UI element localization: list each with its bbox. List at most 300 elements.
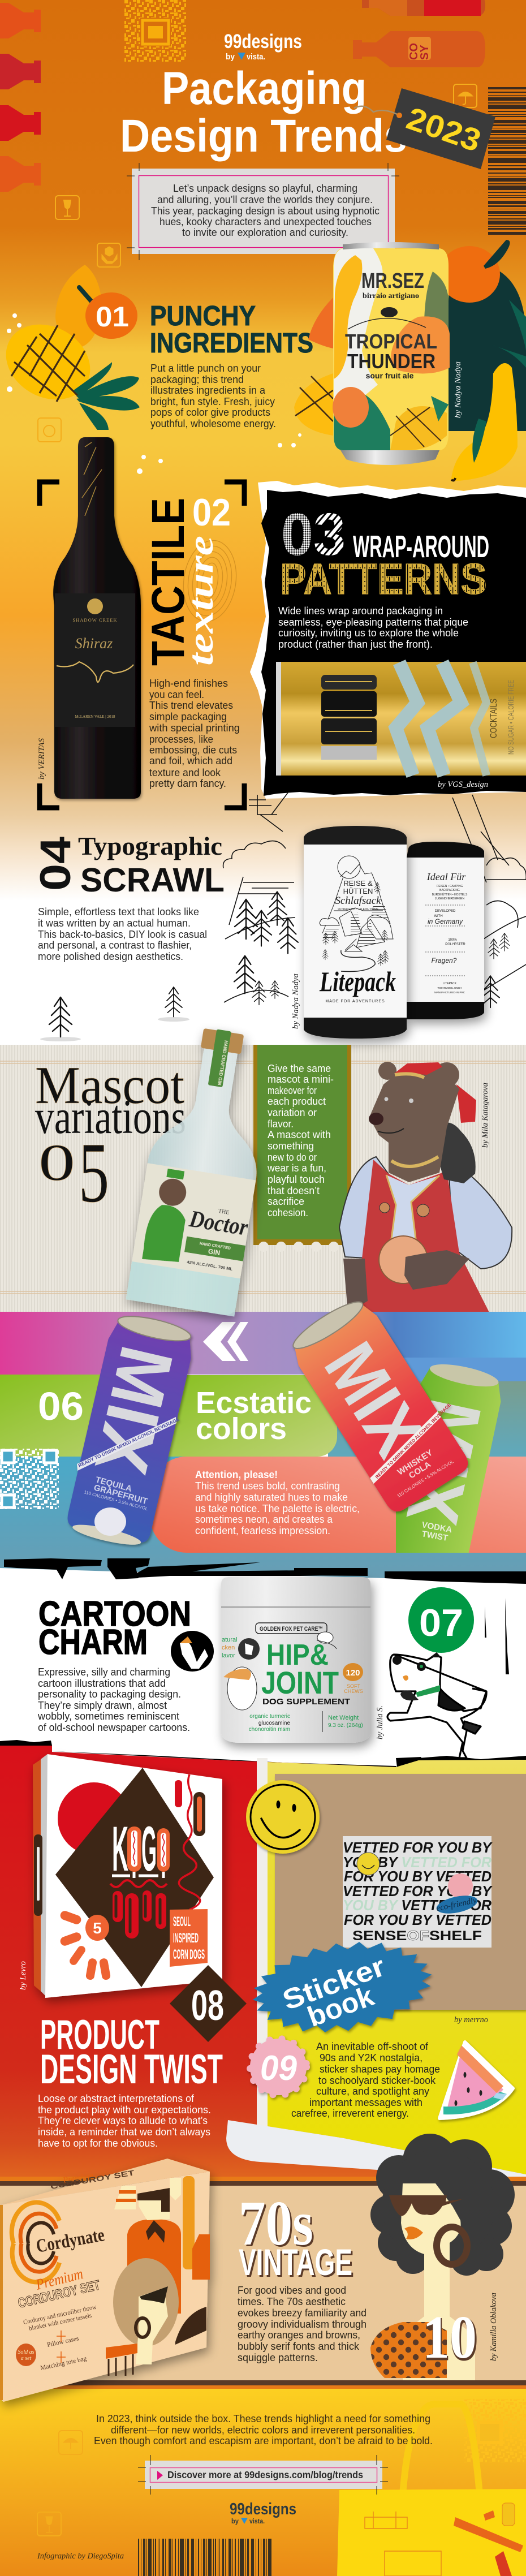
text: section 07 body: Expressive, silly and charming bbox=[38, 1666, 170, 1678]
panel: green ribbon with mascot text: cohesion. bbox=[268, 1207, 308, 1218]
can: mix vodka twist: TWIST bbox=[421, 1529, 449, 1543]
heading: 70s vintage: 70s bbox=[240, 2190, 315, 2260]
text: section 01 body bbox=[150, 362, 276, 429]
box: cordynate corduroy set: CORDUROY SET bbox=[50, 2168, 135, 2191]
heading: product design twist: DESIGN TWIST bbox=[40, 2047, 223, 2092]
credit: Kamilla Oblakova: by Kamilla Oblakova bbox=[489, 2293, 498, 2361]
panel: section 10 tan band bbox=[0, 2177, 526, 2389]
package: litepack back: POLYESTER bbox=[445, 943, 465, 946]
jar: hip and joint: 120 bbox=[346, 1668, 360, 1678]
text: section 09 body: carefree, irreverent energy. bbox=[291, 2107, 409, 2119]
heading: product design twist bbox=[40, 2012, 223, 2092]
number 06: 06 bbox=[38, 1384, 84, 1428]
panel: kraft paper with sticker sheet: YOU BY VETTED FOR bbox=[343, 1897, 491, 1914]
package: litepack back: Fragen? bbox=[432, 957, 457, 964]
package: litepack back: in Germany bbox=[428, 917, 463, 925]
package: litepack front: Schlafsack bbox=[335, 895, 381, 907]
jar: hip and joint: GOLDEN FOX PET CARE™ bbox=[260, 1626, 323, 1632]
panel: section 09 yellow background with white strip bbox=[257, 1758, 526, 2174]
text: section 09 body: An inevitable off-shoot of bbox=[316, 2040, 429, 2052]
icon: wine glass bbox=[55, 196, 79, 219]
bottle: the doctor gin bbox=[126, 1022, 278, 1317]
text: section 10 body: earthy oranges and browns, bbox=[238, 2329, 360, 2341]
package: litepack back bbox=[407, 842, 484, 1019]
text: section 03 body: Wide lines wrap around packaging in bbox=[278, 605, 443, 617]
panel: section 04 white area bbox=[0, 904, 526, 1046]
icon: wine glass bottom bbox=[37, 2512, 61, 2536]
text: section 02 body: processes, like bbox=[149, 733, 213, 745]
icon: package in hands bbox=[97, 243, 120, 267]
box: cordynate corduroy set: Corduroy and microfiber throw bbox=[23, 2304, 97, 2326]
can: tropical thunder: birraio artigiano bbox=[363, 292, 419, 300]
text: closing statement: In 2023, think outside the box. These trends highlight a need for something bbox=[96, 2413, 430, 2424]
text: section 09 body: 90s and Y2K nostalgia, bbox=[320, 2052, 422, 2064]
jar: hip and joint: atural bbox=[222, 1636, 238, 1643]
bottle: the doctor gin: Doctor bbox=[187, 1206, 250, 1241]
title: Packaging bbox=[162, 63, 367, 114]
call to action button bbox=[138, 2455, 388, 2495]
can: mix tequila grapefruit: GRAPEFRUIT bbox=[93, 1483, 149, 1506]
panel: green ribbon with mascot text: each product bbox=[268, 1095, 326, 1107]
logo: 99designs by vista dark: by bbox=[231, 2517, 239, 2525]
text: section 07 body: They’re simply drawn, almost bbox=[38, 1699, 167, 1711]
package: litepack front: REISE & bbox=[343, 879, 373, 888]
text: section 07 body: cartoon illustrations that add bbox=[38, 1677, 166, 1689]
text: section 07 body: wobbly, sometimes reminiscent bbox=[37, 1710, 179, 1722]
number 07 circle bbox=[408, 1587, 474, 1653]
credit: Julia S.: by Julia S. bbox=[376, 1705, 385, 1739]
illustration: fruit and leaves behind can bbox=[137, 240, 526, 481]
left background bottles bbox=[0, 3, 41, 192]
box: kogo corn dogs: SEOUL bbox=[173, 1914, 191, 1929]
heading: punchy ingredients bbox=[150, 301, 313, 359]
jar: hip and joint: glucosamine bbox=[258, 1720, 290, 1726]
text: section 10 body: For good vibes and good bbox=[238, 2284, 346, 2296]
top right background bottles: CO bbox=[408, 43, 420, 60]
panel: kraft paper with sticker sheet: VETTED FOR YOU BY bbox=[343, 1839, 493, 1856]
top right background bottles: SY bbox=[419, 45, 431, 60]
background QR code bottom bbox=[464, 2399, 526, 2462]
heading: ecstatic colors: colors bbox=[196, 1412, 287, 1446]
heading: tactile 02 texture: 02 bbox=[192, 491, 231, 534]
can: wrap-around cocktail can bbox=[276, 662, 526, 776]
jar: hip and joint: HIP& bbox=[266, 1639, 329, 1672]
QR code white bbox=[0, 1449, 59, 1509]
panel: green ribbon with mascot text: Give the same bbox=[268, 1062, 331, 1074]
package: litepack back: Ideal Für bbox=[426, 871, 466, 882]
text: section 07 body bbox=[37, 1666, 190, 1733]
can: mix vodka twist: VODKA bbox=[421, 1520, 453, 1535]
heading: 70s vintage: 70s bbox=[239, 2189, 313, 2259]
jar: hip and joint: chonoroitin msm bbox=[249, 1726, 290, 1733]
text: section 09 body: sticker shapes pay homage bbox=[320, 2063, 440, 2075]
heading: mascot variations 05: 0 bbox=[38, 1134, 75, 1191]
text: section 08 body bbox=[38, 2092, 211, 2149]
bottle: the doctor gin: HAND CRAFTED GIN bbox=[217, 1040, 228, 1085]
package: litepack back: BACKPACKING bbox=[439, 889, 460, 892]
bottle: the doctor gin: HAND CRAFTED bbox=[199, 1242, 231, 1251]
heading: ecstatic colors: Ecstatic bbox=[196, 1386, 312, 1420]
heading: 03 wrap-around patterns: 03 bbox=[281, 501, 346, 568]
section 02 brackets bbox=[40, 482, 244, 808]
panel: green ribbon with mascot text: A mascot with bbox=[268, 1128, 331, 1140]
text: section 08 body: They’re clever ways to allude to what’s bbox=[38, 2114, 208, 2126]
heading: 03 wrap-around patterns: PATTERNS bbox=[280, 555, 487, 604]
jar: hip and joint bbox=[221, 1577, 370, 1743]
text: section 01 body: Put a little punch on your bbox=[150, 362, 261, 374]
text: section 01 body: youthful, wholesome energy. bbox=[150, 417, 276, 429]
can: tropical thunder bbox=[333, 242, 450, 465]
heading: tactile 02 texture: TACTILE bbox=[143, 498, 194, 666]
sticker: starburst sticker book: Sticker bbox=[278, 1950, 389, 2016]
background QR code bbox=[124, 0, 187, 62]
box: kogo corn dogs: CORN DOGS bbox=[173, 1947, 205, 1962]
jar: hip and joint: lavor bbox=[222, 1652, 235, 1659]
text: closing statement bbox=[94, 2413, 433, 2446]
panel: kraft paper with sticker sheet: VETTED FOR YOU BY bbox=[343, 1883, 493, 1899]
text: section 09 body: culture, and spotlight any bbox=[316, 2085, 430, 2097]
jar: hip and joint: 9.3 oz. (264g) bbox=[328, 1722, 363, 1729]
heading: tactile 02 texture: texture bbox=[180, 536, 221, 666]
heading: punchy ingredients: PUNCHY bbox=[150, 301, 256, 331]
can: tropical thunder: MR.SEZ bbox=[361, 269, 424, 293]
box: cordynate corduroy set bbox=[0, 2159, 210, 2402]
can: mix whiskey cola: COLA bbox=[407, 1459, 433, 1481]
title bbox=[120, 63, 407, 162]
text: section 09 body bbox=[291, 2040, 440, 2119]
text: section 07 body: of old-school newspaper cartoons. bbox=[38, 1721, 190, 1733]
text: section 03 body: product (rather than just the front). bbox=[278, 638, 433, 650]
panel: kraft paper with sticker sheet: SENSE OF SHELF bbox=[352, 1928, 482, 1944]
credit: VGS_design: by VGS_design bbox=[438, 780, 488, 789]
package: litepack back: JUGENDHERBERGEN bbox=[435, 897, 465, 901]
heading: 04 typographic scrawl: Typographic bbox=[78, 832, 222, 860]
intro text box: to invite our exploration and curiosity. bbox=[182, 226, 348, 238]
box: cordynate corduroy set: Premium bbox=[33, 2265, 85, 2293]
heading: ecstatic colors bbox=[196, 1386, 312, 1446]
text: section 02 body: embossing, die cuts bbox=[149, 744, 237, 756]
intro text box bbox=[127, 163, 399, 260]
panel: green ribbon with mascot text: makeover for bbox=[268, 1084, 317, 1096]
can: mix tequila grapefruit: READY TO DRINK MIXED ALCOHOL BEVERAGE bbox=[77, 1416, 180, 1468]
text: section 06 body bbox=[195, 1468, 360, 1536]
text: section 08 body: have to opt for the obvious. bbox=[38, 2137, 158, 2149]
text: section 02 body: This trend elevates bbox=[149, 699, 233, 711]
panel: section 08 red background bbox=[0, 1746, 526, 2178]
panel: section 07 white with brush edge bbox=[0, 1558, 526, 1769]
package: litepack back: BURGHÜTTEN • HOSTELS bbox=[432, 893, 468, 897]
panel: kraft paper with sticker sheet bbox=[275, 1774, 526, 2010]
can: mix whiskey cola: 110 CALORIES • 5.5% ALC/VOL bbox=[396, 1459, 455, 1498]
text: section 06 body: us take notice. The palette is electric, bbox=[195, 1502, 360, 1514]
panel: kraft paper with sticker sheet: FOR YOU BY VETTED bbox=[344, 1868, 491, 1885]
can: tropical thunder: TROPICAL bbox=[345, 330, 437, 353]
panel: section 06 colour bands bbox=[0, 1312, 526, 1584]
text: section 04 body bbox=[38, 906, 207, 962]
panel: green ribbon with mascot text: playful touch bbox=[268, 1173, 325, 1185]
package: litepack front: MADE FOR ADVENTURES bbox=[325, 1000, 385, 1003]
can: mix tequila grapefruit: TEQUILA bbox=[94, 1475, 133, 1494]
heading: 04 typographic scrawl: SCRAWL bbox=[80, 861, 225, 899]
box: cordynate corduroy set: a set bbox=[21, 2355, 32, 2362]
can: tropical thunder: THUNDER bbox=[347, 350, 436, 373]
heading: cartoon charm bbox=[38, 1595, 191, 1662]
box: cordynate corduroy set: Pillow cases bbox=[46, 2335, 80, 2349]
text: section 01 body: bright, fun style. Fresh, juicy bbox=[150, 395, 275, 407]
text: section 01 body: packaging; this trend bbox=[150, 373, 244, 385]
package: litepack front: ULTRALEICHT · KLEIN / DÜNN bbox=[338, 907, 378, 911]
panel: green ribbon with mascot text: wear is a fun, bbox=[267, 1162, 326, 1174]
title: Design Trends bbox=[120, 110, 407, 162]
text: section 02 body: with special printing bbox=[149, 722, 240, 734]
text: section 10 body bbox=[238, 2284, 367, 2363]
bottle: the doctor gin: GIN bbox=[208, 1247, 221, 1257]
can: tropical thunder: sour fruit ale bbox=[366, 371, 414, 380]
jar: hip and joint: CHEWS bbox=[344, 1688, 363, 1694]
box: kogo corn dogs: K bbox=[112, 1813, 128, 1884]
text: section 01 body: illustrates ingredients in a bbox=[150, 384, 266, 396]
illustration: bear mascot bbox=[339, 1062, 512, 1318]
credit: infographic by DiegoSpita: Infographic by DiegoSpita bbox=[37, 2552, 124, 2561]
heading: 04 typographic scrawl bbox=[32, 832, 225, 899]
package: litepack back: 100% bbox=[448, 938, 457, 942]
panel: kraft paper with sticker sheet: eco-friendly bbox=[436, 1896, 478, 1913]
logo: 99designs by vista dark: 99designs bbox=[230, 2500, 296, 2518]
box: cordynate corduroy set: Cordynate bbox=[35, 2225, 106, 2257]
credit: Nadya Nadya: by Nadya Nadya bbox=[454, 361, 463, 418]
icon: wine glass small bbox=[38, 418, 61, 442]
number 08 diamond: 08 bbox=[191, 1981, 224, 2029]
text: section 06 body: Attention, please! bbox=[195, 1468, 278, 1480]
wine bottle: SHADOW CREEK bbox=[72, 617, 118, 623]
intro text box: Let’s unpack designs so playful, charming bbox=[173, 182, 357, 194]
text: section 06 body: and highly saturated hues to make bbox=[195, 1491, 348, 1503]
number 09 scalloped sticker: 09 bbox=[260, 2049, 297, 2088]
box: kogo corn dogs: G bbox=[141, 1813, 157, 1884]
heading: punchy ingredients: INGREDIENTS bbox=[150, 328, 313, 359]
credit: Nadya Nadya: by Nadya Nadya bbox=[291, 973, 300, 1029]
panel: green ribbon with mascot text bbox=[253, 1045, 351, 1252]
text: section 06 body: confident, fearless impression. bbox=[195, 1524, 330, 1536]
text: section 02 body: you can feel. bbox=[149, 688, 204, 700]
text: section 06 body: sometimes neon, and creates a bbox=[195, 1513, 333, 1525]
can: mix vodka twist: MIX bbox=[391, 1393, 497, 1531]
can: mix tequila grapefruit bbox=[63, 1310, 198, 1550]
box: kogo corn dogs: 5 bbox=[93, 1919, 102, 1937]
jar: hip and joint: Net Weight bbox=[328, 1715, 359, 1721]
can: mix tequila grapefruit: 110 CALORIES • 5.5% ALC/VOL bbox=[83, 1489, 149, 1511]
text: section 09 body: important messages with bbox=[309, 2096, 422, 2108]
intro text box: and alluring, you’ll crave the worlds they conjure. bbox=[157, 193, 373, 205]
package: litepack back: WITH bbox=[434, 915, 443, 918]
can: wrap-around cocktail can: COCKTAILS bbox=[488, 699, 499, 738]
text: section 10 body: bubbly serif fonts and thick bbox=[238, 2340, 360, 2352]
right barcode bbox=[488, 87, 526, 235]
panel: green ribbon with mascot text: variation or bbox=[268, 1106, 317, 1118]
background tote bag bbox=[337, 2404, 526, 2576]
can: mix whiskey cola: WHISKEY bbox=[396, 1448, 434, 1477]
heading: mascot variations 05: Mascot bbox=[35, 1056, 184, 1115]
credit: merrno: by merrno bbox=[454, 2015, 488, 2024]
can: mix whiskey cola: MIX bbox=[309, 1329, 439, 1470]
jar: hip and joint: JOINT bbox=[261, 1665, 339, 1700]
package: litepack back: REISEN • CAMPING bbox=[437, 885, 463, 888]
box: kogo corn dogs bbox=[33, 1754, 222, 1998]
heading: 70s vintage: VINTAGE bbox=[239, 2241, 352, 2283]
top right background bottles bbox=[351, 0, 485, 67]
intro text box: This year, packaging design is about using hypnotic bbox=[151, 205, 380, 217]
heading: 04 typographic scrawl: 04 bbox=[32, 837, 80, 891]
panel: section 05 striped background bbox=[0, 1045, 526, 1314]
text: section 03 body: seamless, eye-pleasing patterns that pique bbox=[278, 616, 468, 628]
2023 hang tag: 2023 bbox=[402, 100, 485, 158]
box: cordynate corduroy set: Matching tote bag bbox=[40, 2355, 88, 2372]
panel: kraft paper with sticker sheet: YOU BY VETTED FOR bbox=[343, 1854, 491, 1871]
panel: green ribbon with mascot text: new to do or bbox=[268, 1151, 317, 1163]
number 08 diamond bbox=[170, 1965, 247, 2042]
text: section 02 body: and foil, which add bbox=[149, 755, 232, 766]
jar: hip and joint: DOG SUPPLEMENT bbox=[262, 1697, 350, 1707]
can: mix whiskey cola: READY TO DRINK MIXED ALCOHOL BEVERAGE bbox=[374, 1402, 452, 1480]
heading: 70s vintage bbox=[239, 2189, 354, 2285]
package: litepack back: WOHNMOBIL GMBH bbox=[438, 987, 462, 989]
text: closing statement: Even though comfort and escapism are important, don’t be afraid to be bold. bbox=[94, 2435, 433, 2446]
logo: 99designs by vista bbox=[224, 31, 302, 62]
logo: 99designs by vista: vista. bbox=[247, 52, 265, 62]
panel: kraft paper with sticker sheet: FOR YOU BY VETTED bbox=[344, 1911, 491, 1928]
logo: 99designs by vista dark bbox=[230, 2500, 296, 2525]
text: section 10 body: evokes breezy familiarity and bbox=[238, 2307, 367, 2319]
heading: cartoon charm: CHARM bbox=[38, 1623, 148, 1662]
icon: rooster badge bbox=[171, 1631, 214, 1672]
icon: umbrella bottom bbox=[59, 2431, 83, 2454]
panel: green ribbon with mascot text: sacrifice bbox=[268, 1195, 304, 1207]
panel: curled paper corner bbox=[226, 2120, 526, 2178]
text: section 07 body: personality to packaging design. bbox=[38, 1688, 181, 1700]
can: wrap-around cocktail can: NO SUGAR • CALORIE FREE bbox=[506, 680, 515, 755]
text: section 02 body: High-end finishes bbox=[149, 677, 228, 689]
box: cordynate corduroy set: CORDUROY SET bbox=[16, 2277, 102, 2311]
heading: 70s vintage: VINTAGE bbox=[240, 2243, 354, 2285]
heading: mascot variations 05 bbox=[35, 1056, 186, 1220]
number 09 scalloped sticker bbox=[250, 2039, 307, 2095]
box: kogo corn dogs: INSPIRED bbox=[173, 1931, 199, 1946]
sticker: starburst sticker book: book bbox=[303, 1980, 378, 2033]
heading: 03 wrap-around patterns bbox=[280, 501, 489, 604]
credit: Levro: by Levro bbox=[19, 1961, 28, 1990]
text: section 03 body: curiosity, inviting us to explore the whole bbox=[278, 627, 459, 639]
bottle: the doctor gin: THE bbox=[218, 1208, 230, 1216]
wine bottle: Shiraz bbox=[75, 635, 113, 652]
intro text box: hues, kooky characters and unexpected touches bbox=[159, 216, 372, 227]
section 01 illustration: mango and pineapple bbox=[0, 265, 140, 430]
text: section 10 body: squiggle patterns. bbox=[238, 2351, 318, 2363]
box: cordynate corduroy set: blanket with corner tassels bbox=[28, 2312, 93, 2332]
text: section 03 body bbox=[278, 605, 468, 650]
text: section 10 body: times. The 70s aesthetic bbox=[238, 2295, 346, 2307]
icon: umbrella bbox=[454, 84, 477, 107]
text: section 06 body: This trend uses bold, contrasting bbox=[195, 1480, 340, 1492]
heading: product design twist: PRODUCT bbox=[40, 2012, 159, 2058]
panel: green ribbon with mascot text: flavor. bbox=[268, 1118, 294, 1130]
panel: green ribbon with mascot text: something bbox=[268, 1140, 314, 1152]
jar: hip and joint: SOFT bbox=[347, 1683, 361, 1689]
sticker: watermelon slice bbox=[439, 2042, 513, 2118]
jar: hip and joint: cken bbox=[222, 1644, 235, 1651]
package: litepack back: LITEPACK bbox=[443, 982, 457, 985]
text: section 10 body: groovy individualism through bbox=[238, 2318, 367, 2330]
text: section 02 body: texture and look bbox=[149, 766, 221, 778]
sticker: smiley bbox=[246, 1780, 320, 1854]
text: section 08 body: Loose or abstract interpretations of bbox=[38, 2092, 195, 2104]
sticker: starburst sticker book bbox=[247, 1931, 438, 2044]
illustration: woman with afro: 10 bbox=[422, 2306, 478, 2373]
text: section 08 body: the product play with our expectations. bbox=[38, 2104, 211, 2116]
package: litepack front: HÜTTEN bbox=[343, 887, 373, 895]
text: section 04 body: it was written by an actual human. bbox=[38, 917, 191, 929]
package: litepack back: MANUFACTURED IN PRC bbox=[434, 991, 465, 994]
logo: 99designs by vista: by bbox=[226, 52, 235, 62]
bottle: the doctor gin: 42% ALC./VOL. 700 ML bbox=[187, 1259, 233, 1272]
wine bottle: McLAREN VALE | 2018 bbox=[75, 714, 115, 719]
section 06 chevrons bbox=[203, 1322, 248, 1361]
heading: cartoon charm: CARTOON bbox=[38, 1595, 191, 1634]
package: litepack front: Litepack bbox=[319, 966, 396, 997]
package: litepack front bbox=[304, 826, 407, 1039]
illustration: woman with afro bbox=[370, 2134, 515, 2380]
illustration: line-art mountains and trees bbox=[40, 792, 526, 1041]
text: section 04 body: This back-to-basics, DIY look is casual bbox=[38, 928, 207, 940]
heading: mascot variations 05: variations bbox=[35, 1089, 186, 1144]
call to action button: Discover more at 99designs.com/blog/trends bbox=[167, 2469, 363, 2480]
text: section 02 body: pretty darn fancy. bbox=[149, 777, 226, 789]
text: section 09 body: to schoolyard sticker-book bbox=[318, 2074, 436, 2086]
text: section 02 body bbox=[149, 677, 240, 789]
text: section 02 body: simple packaging bbox=[149, 710, 227, 722]
can: mix whiskey cola bbox=[283, 1284, 485, 1516]
panel: green ribbon with mascot text: mascot a mini- bbox=[268, 1073, 334, 1085]
illustration: running dog bbox=[387, 1652, 486, 1758]
text: section 08 body: inside, a reminder that we don’t always bbox=[38, 2126, 210, 2138]
text: section 04 body: more polished design aesthetics. bbox=[38, 950, 183, 962]
logo: 99designs by vista dark: vista. bbox=[249, 2517, 265, 2525]
can: mix tequila grapefruit: MIX bbox=[79, 1339, 189, 1481]
heading: mascot variations 05: 5 bbox=[79, 1125, 109, 1220]
panel: green ribbon with mascot text: that doesn’t bbox=[268, 1184, 320, 1196]
text: section 04 body: Simple, effortless text that looks like bbox=[38, 906, 199, 917]
jar: hip and joint: organic turmeric bbox=[249, 1713, 290, 1720]
text: section 01 body: pops of color give products bbox=[150, 406, 270, 418]
panel: section 03 torn black paper bbox=[250, 481, 526, 799]
package: litepack back: DEVELOPED bbox=[435, 910, 456, 913]
heading: tactile 02 texture bbox=[143, 491, 242, 666]
wine bottle bbox=[53, 437, 141, 799]
credit: Mila Katagarova: by Mila Katagarova bbox=[481, 1083, 490, 1148]
text: section 04 body: and personal, a contrast to flashier, bbox=[38, 939, 192, 951]
illustration: woman with afro: 10 bbox=[422, 2304, 477, 2371]
box: cordynate corduroy set: Premium bbox=[62, 2172, 94, 2185]
number 07 circle: 07 bbox=[419, 1601, 463, 1644]
panel: top background gradient bbox=[0, 0, 526, 905]
panel: closing background gradient bbox=[0, 2389, 526, 2576]
box: cordynate corduroy set: Sold as bbox=[18, 2349, 35, 2355]
bottom barcode bbox=[138, 2539, 273, 2576]
section 01 illustration: mango and pineapple: 01 bbox=[96, 301, 129, 333]
text: closing statement: different—for new worlds, electric colors and irreverent personalities. bbox=[111, 2424, 415, 2436]
credit: VERITAS: by VERITAS bbox=[37, 738, 46, 779]
logo: 99designs by vista: 99designs bbox=[224, 31, 302, 53]
2023 hang tag bbox=[354, 88, 495, 169]
